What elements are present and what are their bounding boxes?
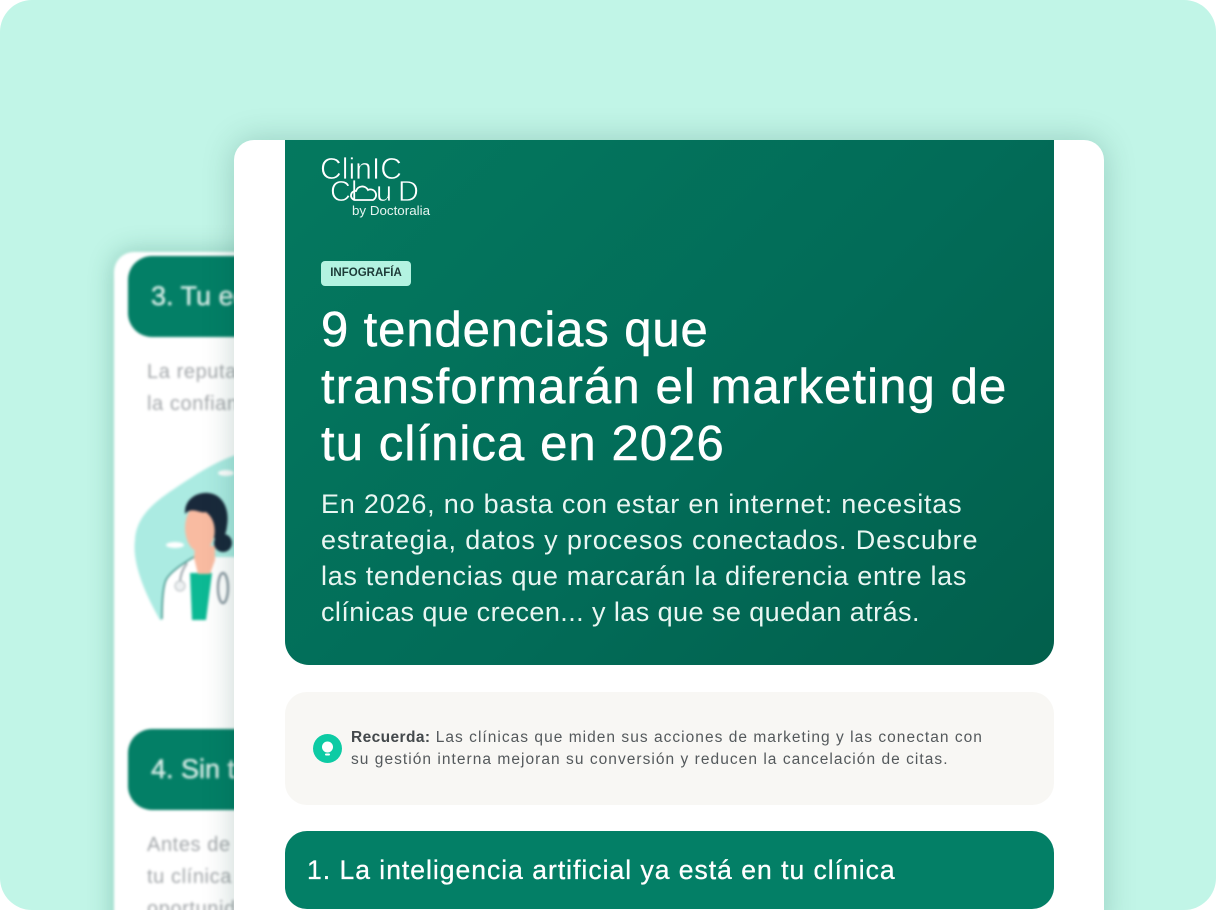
title: transformarán el marketing de [321, 360, 1007, 414]
logo: Clinic Cloud by Doctoralia: u [376, 176, 392, 208]
section heading 1 [285, 831, 1054, 909]
intro text: clínicas que crecen... y las que se quedan atrás. [321, 597, 920, 627]
intro text [321, 489, 978, 627]
title [321, 303, 1007, 471]
paragraph 4: Antes de la [147, 834, 254, 856]
callout text [351, 729, 983, 768]
tag: infografía [321, 261, 411, 286]
section heading 3: 3. Tu equipo [151, 281, 300, 311]
heading text: 1. La inteligencia artificial ya está en tu clínica [307, 855, 896, 885]
callout: recuerda [285, 692, 1054, 805]
logo: Clinic Cloud by Doctoralia: by Doctoralia [352, 204, 430, 218]
paragraph 4: tu clínica ya [147, 866, 260, 888]
logo: Clinic Cloud by Doctoralia [320, 151, 430, 218]
tag: infografía: INFOGRAFÍA [330, 267, 402, 279]
section heading 4 [128, 729, 428, 810]
paragraph 3: la confianza [147, 393, 261, 415]
title: 9 tendencias que [321, 303, 709, 357]
paragraph 4 [146, 834, 260, 910]
back card: blurred page behind [114, 252, 414, 910]
section heading 4: 4. Sin tiempo [151, 754, 309, 784]
intro text: las tendencias que marcarán la diferencia entre las [321, 561, 967, 591]
intro text: estrategia, datos y procesos conectados. Descubre [321, 525, 978, 555]
icon: lightbulb [313, 734, 342, 763]
callout text: Recuerda: Las clínicas que miden sus acciones de marketing y las conectan con [351, 729, 983, 746]
front card [234, 140, 1104, 910]
logo: Clinic Cloud by Doctoralia: ClinIC [320, 151, 402, 186]
paragraph 3: La reputación [147, 361, 276, 383]
illustration: doctor [133, 454, 234, 622]
logo: Clinic Cloud by Doctoralia: Cl [330, 176, 357, 208]
logo: Clinic Cloud by Doctoralia: D [398, 176, 419, 208]
title: tu clínica en 2026 [321, 417, 725, 471]
paragraph 3 [146, 361, 276, 415]
hero panel [285, 120, 1054, 665]
section heading 3 [128, 256, 428, 337]
intro text: En 2026, no basta con estar en internet: necesitas [321, 489, 962, 519]
callout text: su gestión interna mejoran su conversión y reducen la cancelación de citas. [351, 750, 949, 768]
